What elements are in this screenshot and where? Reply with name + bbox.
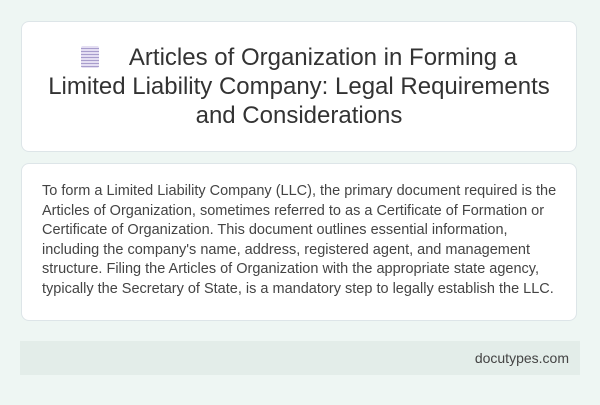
- title: Limited Liability Company: Legal Requirements: [48, 73, 550, 100]
- title: [48, 44, 550, 129]
- text panel: Articles of Organization, sometimes referred to as a Certificate of Formation or: [42, 203, 544, 219]
- text panel: typically the Secretary of State, is a mandatory step to legally establish the LLC.: [42, 281, 554, 297]
- footer: [20, 341, 580, 375]
- text panel: [21, 163, 577, 321]
- title panel: [21, 21, 577, 152]
- text panel: To form a Limited Liability Company (LLC), the primary document required is the: [42, 183, 556, 199]
- title: Articles of Organization in Forming a: [129, 44, 517, 71]
- footer: docutypes.com: [475, 350, 569, 366]
- text panel: Certificate of Organization. This document outlines essential information,: [42, 222, 508, 238]
- text panel: structure. Filing the Articles of Organization with the appropriate state agency,: [42, 261, 539, 277]
- title: and Considerations: [196, 102, 402, 129]
- text panel: including the company's name, address, registered agent, and management: [42, 242, 530, 258]
